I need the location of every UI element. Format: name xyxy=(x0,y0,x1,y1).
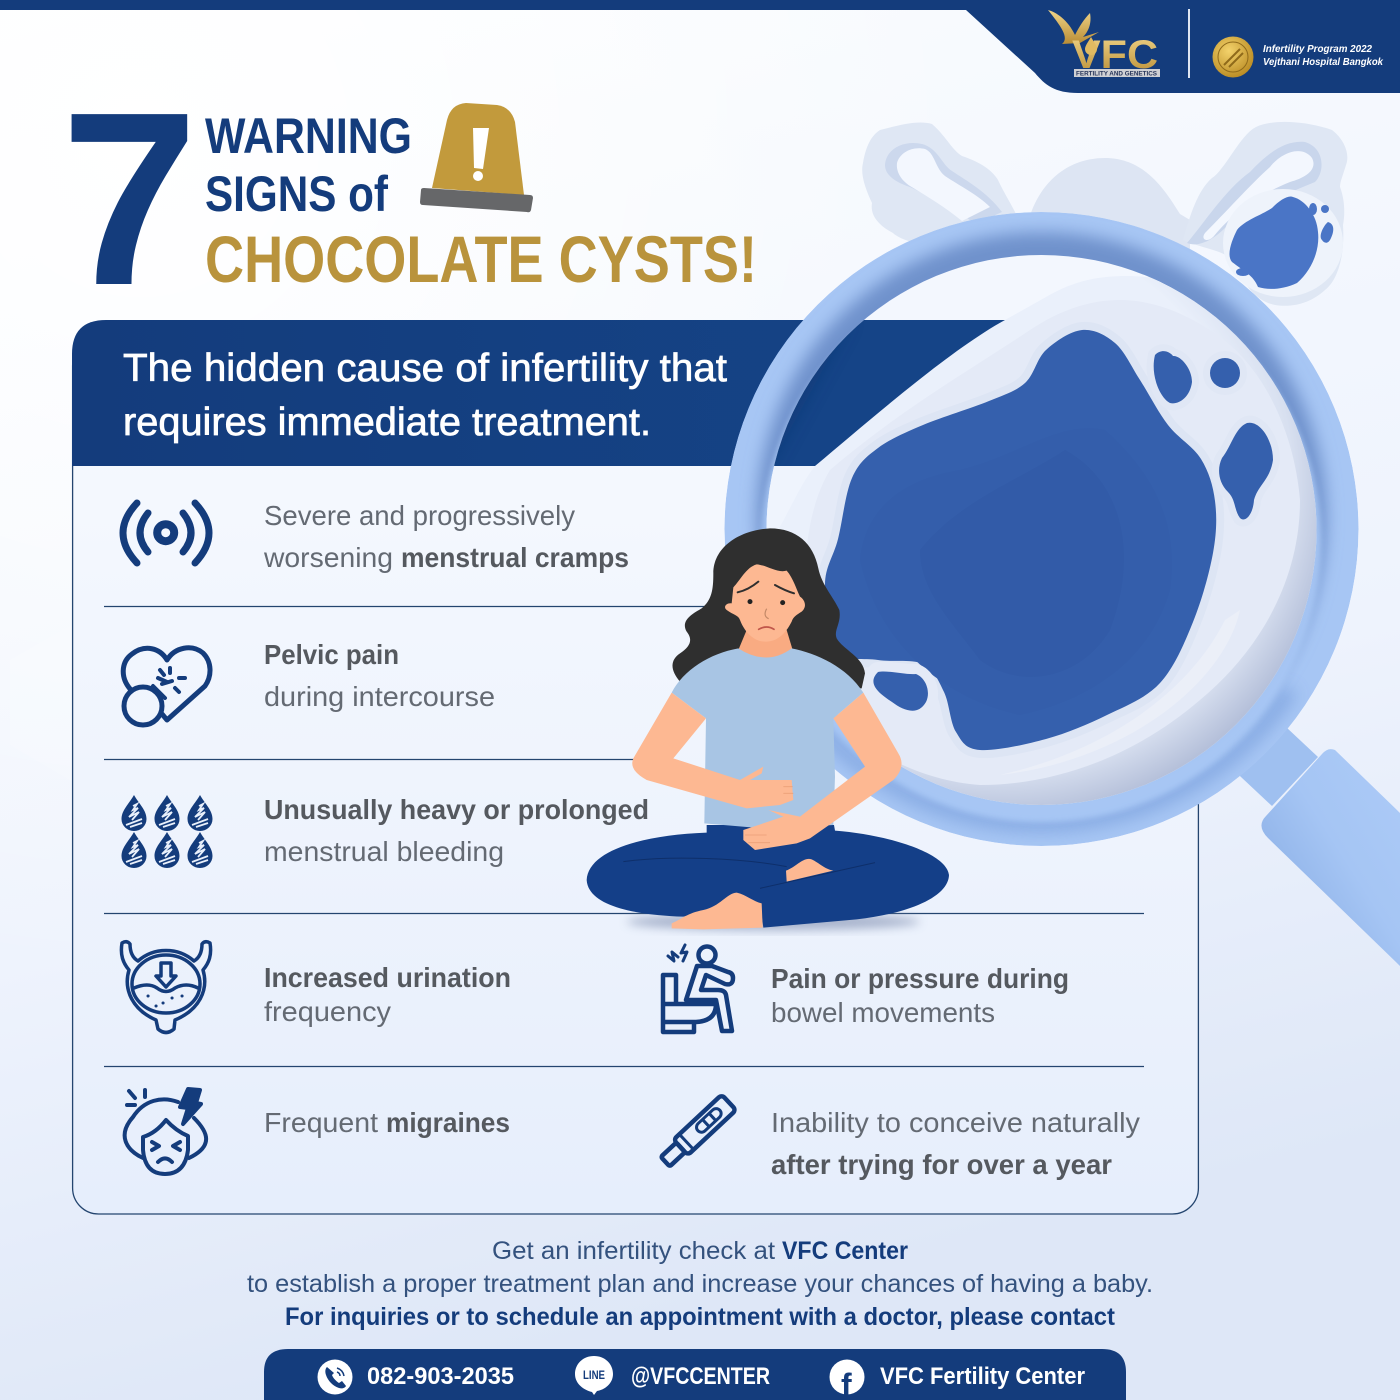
footer message: For inquiries or to schedule an appointment with a doctor, please contact xyxy=(285,1303,1116,1331)
ovary cyst, small xyxy=(1229,197,1333,289)
title xyxy=(61,61,757,337)
icon: person on toilet xyxy=(663,945,733,1032)
panel heading: requires immediate treatment. xyxy=(123,401,651,444)
item: bowel pain xyxy=(771,963,1069,1028)
icon: heart with pelvic pain xyxy=(123,648,210,725)
item: heavy bleeding: Unusually heavy or prolonged xyxy=(264,794,649,825)
accreditation text: Infertility Program 2022 xyxy=(1263,43,1372,55)
item: urination: Increased urination xyxy=(264,962,511,993)
item: pelvic pain xyxy=(264,639,495,712)
uterus illustration behind lens xyxy=(862,122,1347,306)
item: heavy bleeding: menstrual bleeding xyxy=(264,836,504,867)
illustration: woman holding abdomen xyxy=(587,528,949,930)
icon: Facebook xyxy=(830,1360,864,1400)
icon: phone xyxy=(318,1360,352,1394)
item: menstrual cramps: Severe and progressively xyxy=(264,500,575,531)
footer message xyxy=(247,1237,1153,1331)
hair xyxy=(672,528,865,688)
title: WARNING xyxy=(205,108,412,164)
accreditation text xyxy=(1263,43,1384,68)
panel heading xyxy=(72,320,1010,466)
item: migraines xyxy=(264,1107,510,1138)
icon: LINE: LINE xyxy=(583,1368,605,1382)
arms and hands xyxy=(632,693,902,850)
item: bowel pain: bowel movements xyxy=(771,997,995,1028)
item: menstrual cramps: worsening xyxy=(263,542,393,573)
item: urination: frequency xyxy=(264,996,391,1027)
neck xyxy=(738,630,793,659)
item: pelvic pain: during intercourse xyxy=(264,681,495,712)
magnifying glass xyxy=(724,212,1400,966)
icon: bladder xyxy=(121,942,211,1032)
footer message: to establish a proper treatment plan and increase your chances of having a baby. xyxy=(247,1270,1153,1298)
icon: VFC stork logo: FERTILITY AND GENETICS xyxy=(1076,70,1158,78)
item: inability to conceive xyxy=(771,1107,1140,1180)
item: menstrual cramps xyxy=(263,500,629,573)
item: inability to conceive: after trying for over a year xyxy=(771,1149,1112,1180)
pants and legs xyxy=(587,825,949,929)
icon: LINE xyxy=(575,1356,613,1395)
footer message: Get an infertility check at xyxy=(492,1237,775,1265)
contact: Facebook page: VFC Fertility Center xyxy=(880,1363,1085,1390)
icon: pain signal xyxy=(123,503,209,563)
item: heavy bleeding xyxy=(264,794,649,867)
contact: LINE handle: @VFCCENTER xyxy=(631,1363,770,1390)
icon: blood drops xyxy=(122,795,212,868)
footer message: VFC Center xyxy=(782,1237,908,1265)
icon: VFC stork logo: VFC xyxy=(1072,33,1158,77)
title: 7 xyxy=(61,61,198,337)
item: menstrual cramps: menstrual cramps xyxy=(401,542,629,573)
shirt xyxy=(672,648,863,829)
face xyxy=(725,564,805,642)
item: pelvic pain: Pelvic pain xyxy=(264,639,399,670)
panel heading: The hidden cause of infertility that xyxy=(123,347,727,390)
item: migraines: Frequent xyxy=(264,1107,378,1138)
header bar with logos xyxy=(0,0,1400,93)
lens ring xyxy=(724,212,1358,846)
icon: pregnancy test xyxy=(658,1095,736,1169)
icon: VFC stork logo xyxy=(1048,10,1160,78)
icon: warning beacon xyxy=(420,103,533,212)
item: inability to conceive: Inability to conceive naturally xyxy=(771,1107,1140,1138)
contact bar xyxy=(264,1349,1126,1400)
item: migraines: migraines xyxy=(386,1107,510,1138)
ovary body xyxy=(807,276,1316,805)
lens interior: cyst close-up xyxy=(766,255,1316,805)
icon: gold accreditation seal xyxy=(1212,36,1254,78)
accreditation text: Vejthani Hospital Bangkok xyxy=(1263,56,1384,68)
item: urination xyxy=(264,962,511,1027)
contact: phone number: 082-903-2035 xyxy=(367,1363,514,1390)
title: CHOCOLATE CYSTS! xyxy=(205,222,757,296)
panel: symptoms list xyxy=(72,320,1198,1214)
item: bowel pain: Pain or pressure during xyxy=(771,963,1069,994)
icon: migraine head xyxy=(125,1089,206,1174)
title: SIGNS of xyxy=(205,166,388,222)
cyst shapes xyxy=(825,330,1273,750)
handle xyxy=(1225,712,1400,966)
